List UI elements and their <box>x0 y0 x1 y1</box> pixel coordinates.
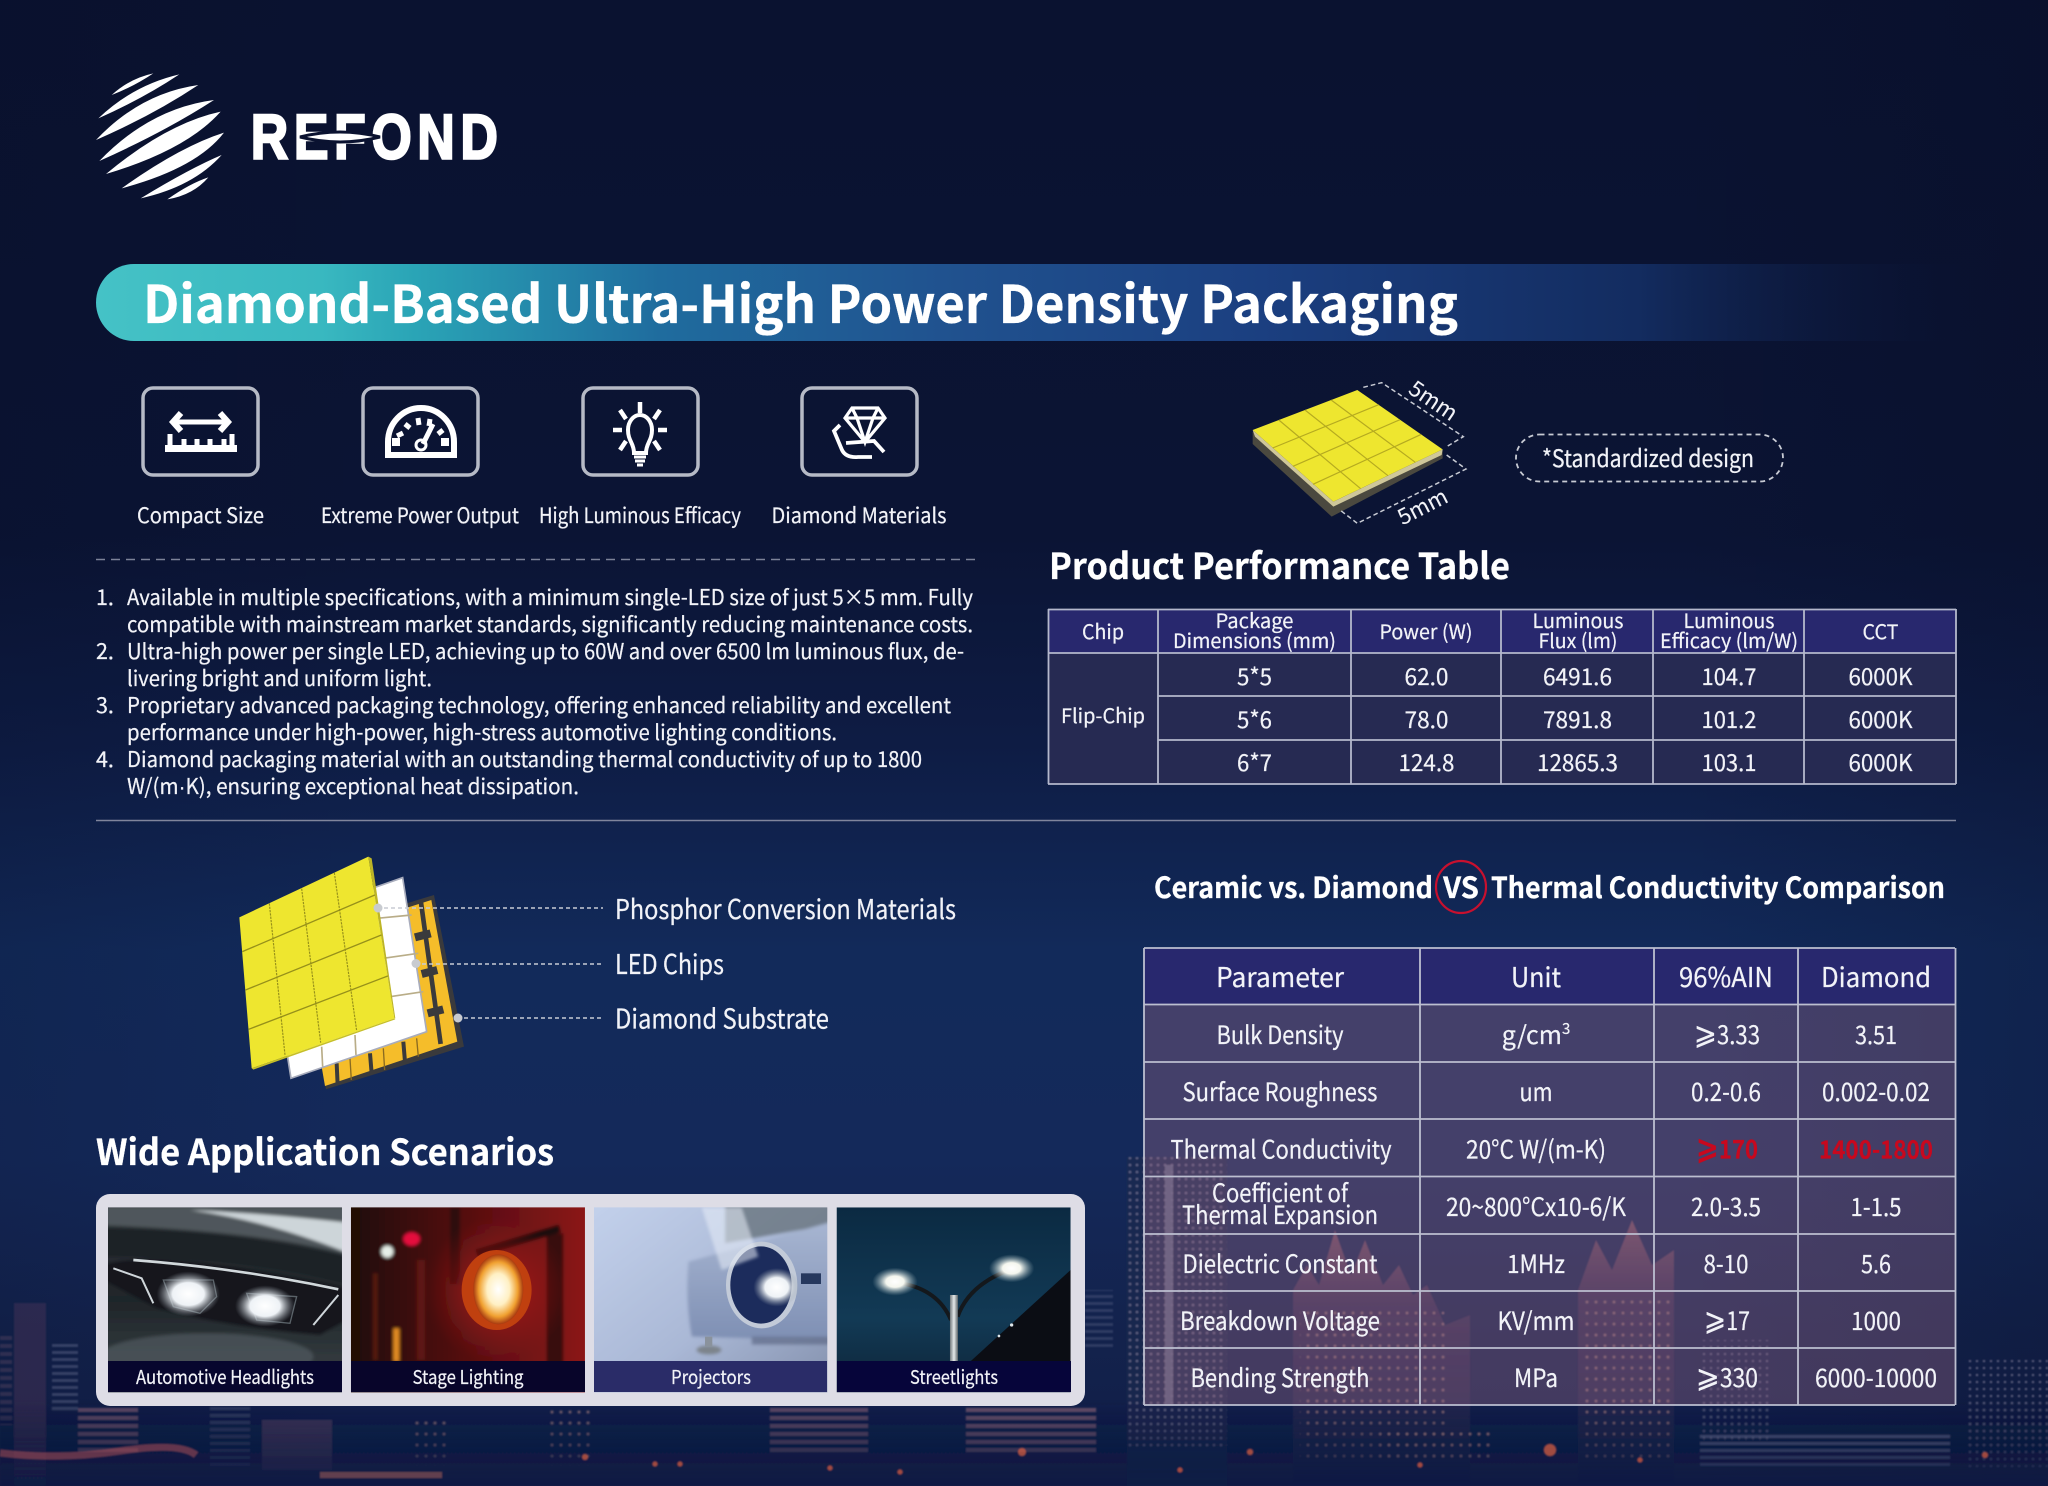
comparison body: Bulk Density <box>1216 1016 1344 1052</box>
caption: streetlights: Streetlights <box>910 1363 998 1390</box>
title banner: Diamond-Based Ultra-High Power Density Packaging <box>143 263 1458 338</box>
comparison body: 5.6 <box>1861 1245 1891 1281</box>
image: stage lighting <box>350 1207 585 1392</box>
comparison body: 20~800°Cx10-6/K <box>1446 1188 1627 1224</box>
comparison body: um <box>1520 1073 1552 1109</box>
image: automotive headlights <box>108 1207 342 1392</box>
product performance table <box>1048 605 1956 784</box>
caption: automotive headlights: Automotive Headlights <box>136 1363 314 1390</box>
caption: stage lighting <box>351 1361 585 1392</box>
table body: 62.0 <box>1404 658 1448 692</box>
table header: Efficacy (lm/W) <box>1660 625 1798 654</box>
table body: 6000K <box>1848 658 1913 692</box>
comparison body: ⩾330 <box>1696 1351 1758 1396</box>
standardized design pill <box>1516 434 1783 482</box>
comparison body: ⩾17 <box>1704 1294 1750 1339</box>
label: high luminous efficacy: High Luminous Efficacy <box>539 500 741 530</box>
feature list: 3. <box>96 689 114 720</box>
diamond substrate layer <box>297 895 464 1089</box>
comparison body: 1-1.5 <box>1850 1188 1902 1224</box>
comparison body: 1400-1800 <box>1819 1130 1933 1166</box>
table body: 78.0 <box>1404 701 1448 735</box>
feature icons row <box>137 388 947 530</box>
image: streetlights <box>837 1207 1071 1392</box>
caption: streetlights <box>837 1361 1071 1392</box>
callout: LED chips <box>412 943 724 982</box>
comparison header <box>1216 956 1931 995</box>
table body: 12865.3 <box>1537 744 1618 778</box>
table header: Chip <box>1082 616 1124 645</box>
comparison body: 3 <box>1562 1018 1570 1039</box>
LED chips layer <box>267 878 427 1078</box>
icon: power gauge <box>363 388 478 475</box>
table body: 6000K <box>1848 744 1913 778</box>
heading: wide application scenarios: Wide Application Scenarios <box>96 1124 554 1176</box>
comparison body: 0.002-0.02 <box>1822 1073 1930 1109</box>
VS badge: VS <box>1442 865 1479 907</box>
comparison body: Breakdown Voltage <box>1180 1302 1380 1338</box>
table header: CCT <box>1862 616 1899 645</box>
thermal comparison table <box>1144 948 1956 1405</box>
icon: diamond in hand <box>802 388 917 475</box>
table header: Flux (lm) <box>1538 625 1618 654</box>
5mm chip illustration <box>1253 371 1466 532</box>
feature list <box>96 581 973 801</box>
feature list: 2. <box>96 635 114 666</box>
heading: product performance table: Product Performance Table <box>1049 538 1510 590</box>
comparison header: 96%AIN <box>1679 956 1773 995</box>
feature list: Available in multiple specifications, with a minimum single-LED size of just 5×5 mm. Fully <box>127 581 973 612</box>
feature list: Ultra-high power per single LED, achieving up to 60W and over 6500 lm luminous flux, de- <box>127 635 964 666</box>
VS badge <box>1436 861 1486 913</box>
feature list: compatible with mainstream market standards, significantly reducing maintenance costs. <box>127 608 973 639</box>
exploded package diagram <box>239 857 464 1089</box>
table body: 6000K <box>1848 701 1913 735</box>
icon: compact size <box>143 388 258 475</box>
comparison header: Diamond <box>1821 956 1931 995</box>
panel: application scenarios <box>96 1194 1085 1406</box>
table header: Package <box>1216 605 1294 634</box>
caption: projectors <box>594 1361 827 1392</box>
heading: thermal conductivity comparison <box>1154 861 1945 913</box>
table header: Luminous <box>1532 605 1624 634</box>
feature list: 1. <box>96 581 114 612</box>
table body: 6491.6 <box>1543 658 1612 692</box>
standardized design pill: *Standardized design <box>1542 439 1754 474</box>
callout: phosphor conversion materials: Phosphor Conversion Materials <box>615 888 956 927</box>
table body: 101.2 <box>1702 701 1756 735</box>
feature list: 4. <box>96 743 114 774</box>
table body <box>1061 658 1913 778</box>
chip dimension dashes <box>1340 383 1466 523</box>
logo sphere mark <box>96 73 224 199</box>
feature list: Diamond packaging material with an outstanding thermal conductivity of up to 1800 <box>127 743 922 774</box>
comparison body: 6000-10000 <box>1815 1359 1937 1395</box>
heading: thermal conductivity comparison: Ceramic vs. Diamond <box>1154 865 1433 907</box>
phosphor layer <box>239 857 395 1070</box>
heading: thermal conductivity comparison: Thermal Conductivity Comparison <box>1491 865 1945 907</box>
feature list: performance under high-power, high-stress automotive lighting conditions. <box>127 716 837 747</box>
image: projector <box>594 1207 828 1392</box>
comparison body: MPa <box>1514 1359 1558 1395</box>
logo wordmark: REFOND <box>251 103 498 173</box>
feature list: Proprietary advanced packaging technology, offering enhanced reliability and excellent <box>127 689 951 720</box>
comparison body: 20°C W/(m-K) <box>1466 1130 1606 1166</box>
caption: stage lighting: Stage Lighting <box>412 1363 524 1390</box>
comparison body: 8-10 <box>1704 1245 1748 1281</box>
comparison header: Parameter <box>1216 956 1344 995</box>
label: extreme power output: Extreme Power Output <box>321 500 519 530</box>
label: compact size: Compact Size <box>137 500 264 530</box>
city skyline background <box>0 1157 2048 1486</box>
comparison body: 1MHz <box>1507 1245 1565 1281</box>
comparison body: 1000 <box>1851 1302 1901 1338</box>
table header <box>1082 605 1899 654</box>
feature list: W/(m·K), ensuring exceptional heat dissipation. <box>127 770 579 801</box>
comparison body: g/cm <box>1502 1016 1562 1052</box>
comparison body: 2.0-3.5 <box>1691 1188 1761 1224</box>
comparison body: Dielectric Constant <box>1182 1245 1378 1281</box>
table body: 104.7 <box>1702 658 1756 692</box>
feature list: livering bright and uniform light. <box>127 662 432 693</box>
comparison body: 3.51 <box>1855 1016 1897 1052</box>
title banner <box>96 263 1975 341</box>
table body: 124.8 <box>1398 744 1454 778</box>
callout: diamond substrate <box>454 998 829 1036</box>
comparison body: Thermal Expansion <box>1182 1196 1378 1232</box>
comparison body: Surface Roughness <box>1182 1073 1378 1109</box>
callout: LED chips: LED Chips <box>615 943 724 982</box>
comparison header: Unit <box>1511 956 1561 995</box>
logo: Refond <box>96 73 498 199</box>
comparison body: Bending Strength <box>1190 1359 1370 1395</box>
comparison body <box>1170 1008 1937 1396</box>
caption: projectors: Projectors <box>671 1363 751 1390</box>
comparison body: ⩾3.33 <box>1694 1008 1760 1053</box>
table header: Dimensions (mm) <box>1173 625 1336 654</box>
comparison body: KV/mm <box>1498 1302 1574 1338</box>
table body: 5*5 <box>1237 658 1272 692</box>
comparison body: ⩾170 <box>1696 1122 1758 1168</box>
table header: Luminous <box>1684 605 1774 634</box>
icon: light bulb <box>583 388 698 475</box>
comparison body: Thermal Conductivity <box>1170 1130 1392 1166</box>
dimension label: top: 5mm <box>1403 371 1465 428</box>
dimension label: bottom: 5mm <box>1391 479 1453 532</box>
table header: Power (W) <box>1380 616 1472 645</box>
table body: 5*6 <box>1237 701 1272 735</box>
table body: 6*7 <box>1237 744 1272 778</box>
table body: 103.1 <box>1702 744 1756 778</box>
label: diamond materials: Diamond Materials <box>772 500 947 530</box>
comparison body: Coefficient of <box>1212 1174 1349 1210</box>
comparison body: 0.2-0.6 <box>1691 1073 1761 1109</box>
table body: 7891.8 <box>1543 701 1612 735</box>
callout: phosphor conversion materials <box>374 888 956 927</box>
table body: Flip-Chip <box>1061 700 1145 729</box>
callout: diamond substrate: Diamond Substrate <box>615 998 829 1036</box>
